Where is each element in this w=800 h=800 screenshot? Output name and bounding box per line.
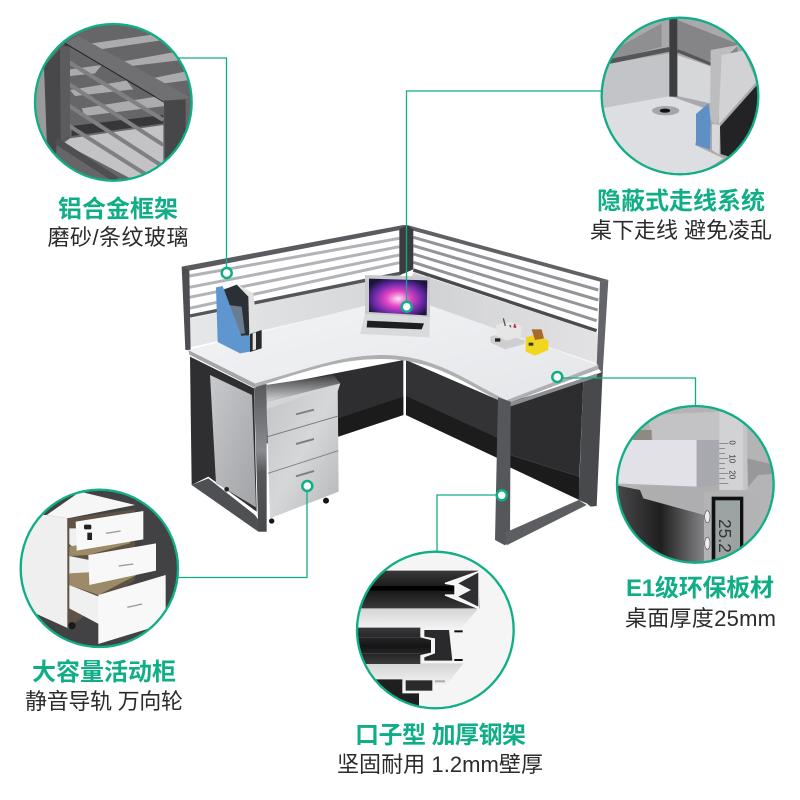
label: drawer: 大容量活动柜 xyxy=(32,659,176,686)
label: board xyxy=(625,575,776,631)
label: frame: 铝合金框架 xyxy=(58,195,178,223)
label: frame xyxy=(48,195,188,250)
label: board: E1级环保板材 xyxy=(626,575,774,602)
magazine holder with books xyxy=(216,284,262,353)
label: cable routing: 隐蔽式走线系统 xyxy=(597,188,765,215)
detail circle: board thickness caliper: 0 xyxy=(727,440,736,445)
label: steel frame: 口子型 加厚钢架 xyxy=(355,722,526,749)
illustration: L-shaped office desk xyxy=(182,225,608,545)
label: cable routing: 桌下走线 避免凌乱 xyxy=(590,218,772,243)
detail circle: aluminium frame xyxy=(30,20,197,187)
label: board: 桌面厚度25mm xyxy=(625,606,776,631)
front right leg frame xyxy=(495,373,597,545)
label: frame: 磨砂/条纹玻璃 xyxy=(48,225,188,250)
right back leg xyxy=(579,372,603,507)
partition glass slats xyxy=(189,237,598,321)
label: drawer: 静音导轨 万向轮 xyxy=(25,689,183,714)
detail circle: board thickness caliper: 25.2 xyxy=(715,519,735,553)
leader line: drawer xyxy=(178,486,307,578)
detail circle: board thickness caliper: 10 xyxy=(727,454,736,464)
label: steel frame xyxy=(337,722,543,777)
leader line: board xyxy=(557,378,696,405)
leader line: frame xyxy=(178,58,226,273)
label: drawer xyxy=(25,659,183,714)
desktop xyxy=(188,296,598,404)
detail circle: board thickness caliper: 20 xyxy=(727,470,736,480)
detail circle: open drawers xyxy=(17,488,180,648)
left side panel and leg xyxy=(190,357,267,532)
label: cable routing xyxy=(590,188,772,243)
detail circle: board thickness caliper xyxy=(615,403,778,568)
back modesty panels xyxy=(267,360,583,500)
leader line: cable routing xyxy=(406,91,601,307)
leader line: steel frame xyxy=(437,495,502,552)
mobile pedestal drawer xyxy=(224,375,340,524)
lower partition panels xyxy=(191,273,598,364)
detail circle: steel profile cross sections xyxy=(355,550,518,713)
label: steel frame: 坚固耐用 1.2mm壁厚 xyxy=(337,752,543,777)
pen holder and yellow box xyxy=(490,318,548,356)
partition frame xyxy=(182,225,608,373)
detail circle: hidden cable routing xyxy=(600,17,760,180)
laptop xyxy=(360,275,430,337)
hotspot dots xyxy=(222,268,562,500)
